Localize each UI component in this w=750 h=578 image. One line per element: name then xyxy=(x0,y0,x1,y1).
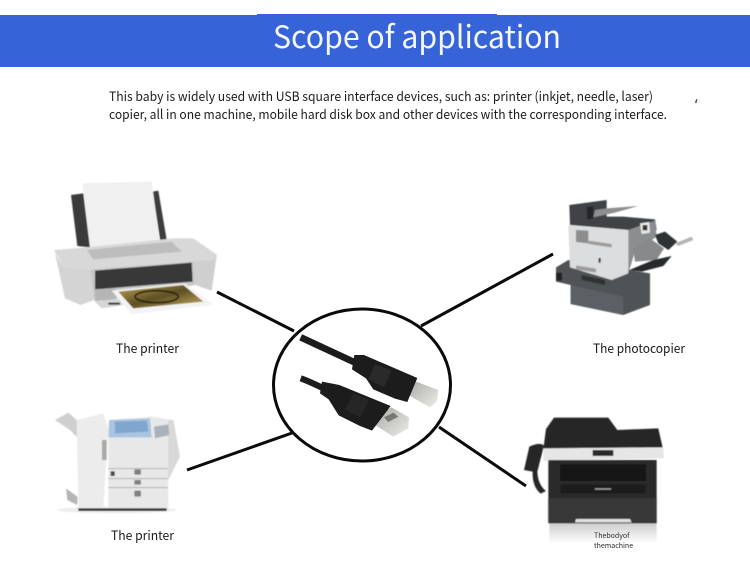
stray mark xyxy=(695,99,697,103)
description text xyxy=(109,86,667,123)
title banner xyxy=(0,12,750,67)
description text: copier, all in one machine, mobile hard disk box and other devices with the corresponding interface. xyxy=(109,104,667,123)
icon: office copier xyxy=(55,413,180,513)
central circle with usb cable xyxy=(274,309,450,461)
label: the body of the machine: Thebodyof xyxy=(594,531,630,541)
connector lines xyxy=(187,254,553,486)
label: the body of the machine xyxy=(594,531,633,551)
icon: photocopier xyxy=(556,200,693,315)
icon: multifunction machine with phone xyxy=(524,418,664,543)
label: the body of the machine: themachine xyxy=(594,541,633,551)
description text: This baby is widely used with USB square interface devices, such as: printer (inkjet, needle, laser) xyxy=(109,86,653,105)
icon: inkjet printer xyxy=(54,182,217,314)
icon: usb cable xyxy=(301,337,438,437)
label: the printer: The printer xyxy=(111,525,174,544)
title: Scope of application xyxy=(273,12,561,57)
label: the printer: The printer xyxy=(116,338,179,357)
label: the photocopier: The photocopier xyxy=(593,338,685,357)
